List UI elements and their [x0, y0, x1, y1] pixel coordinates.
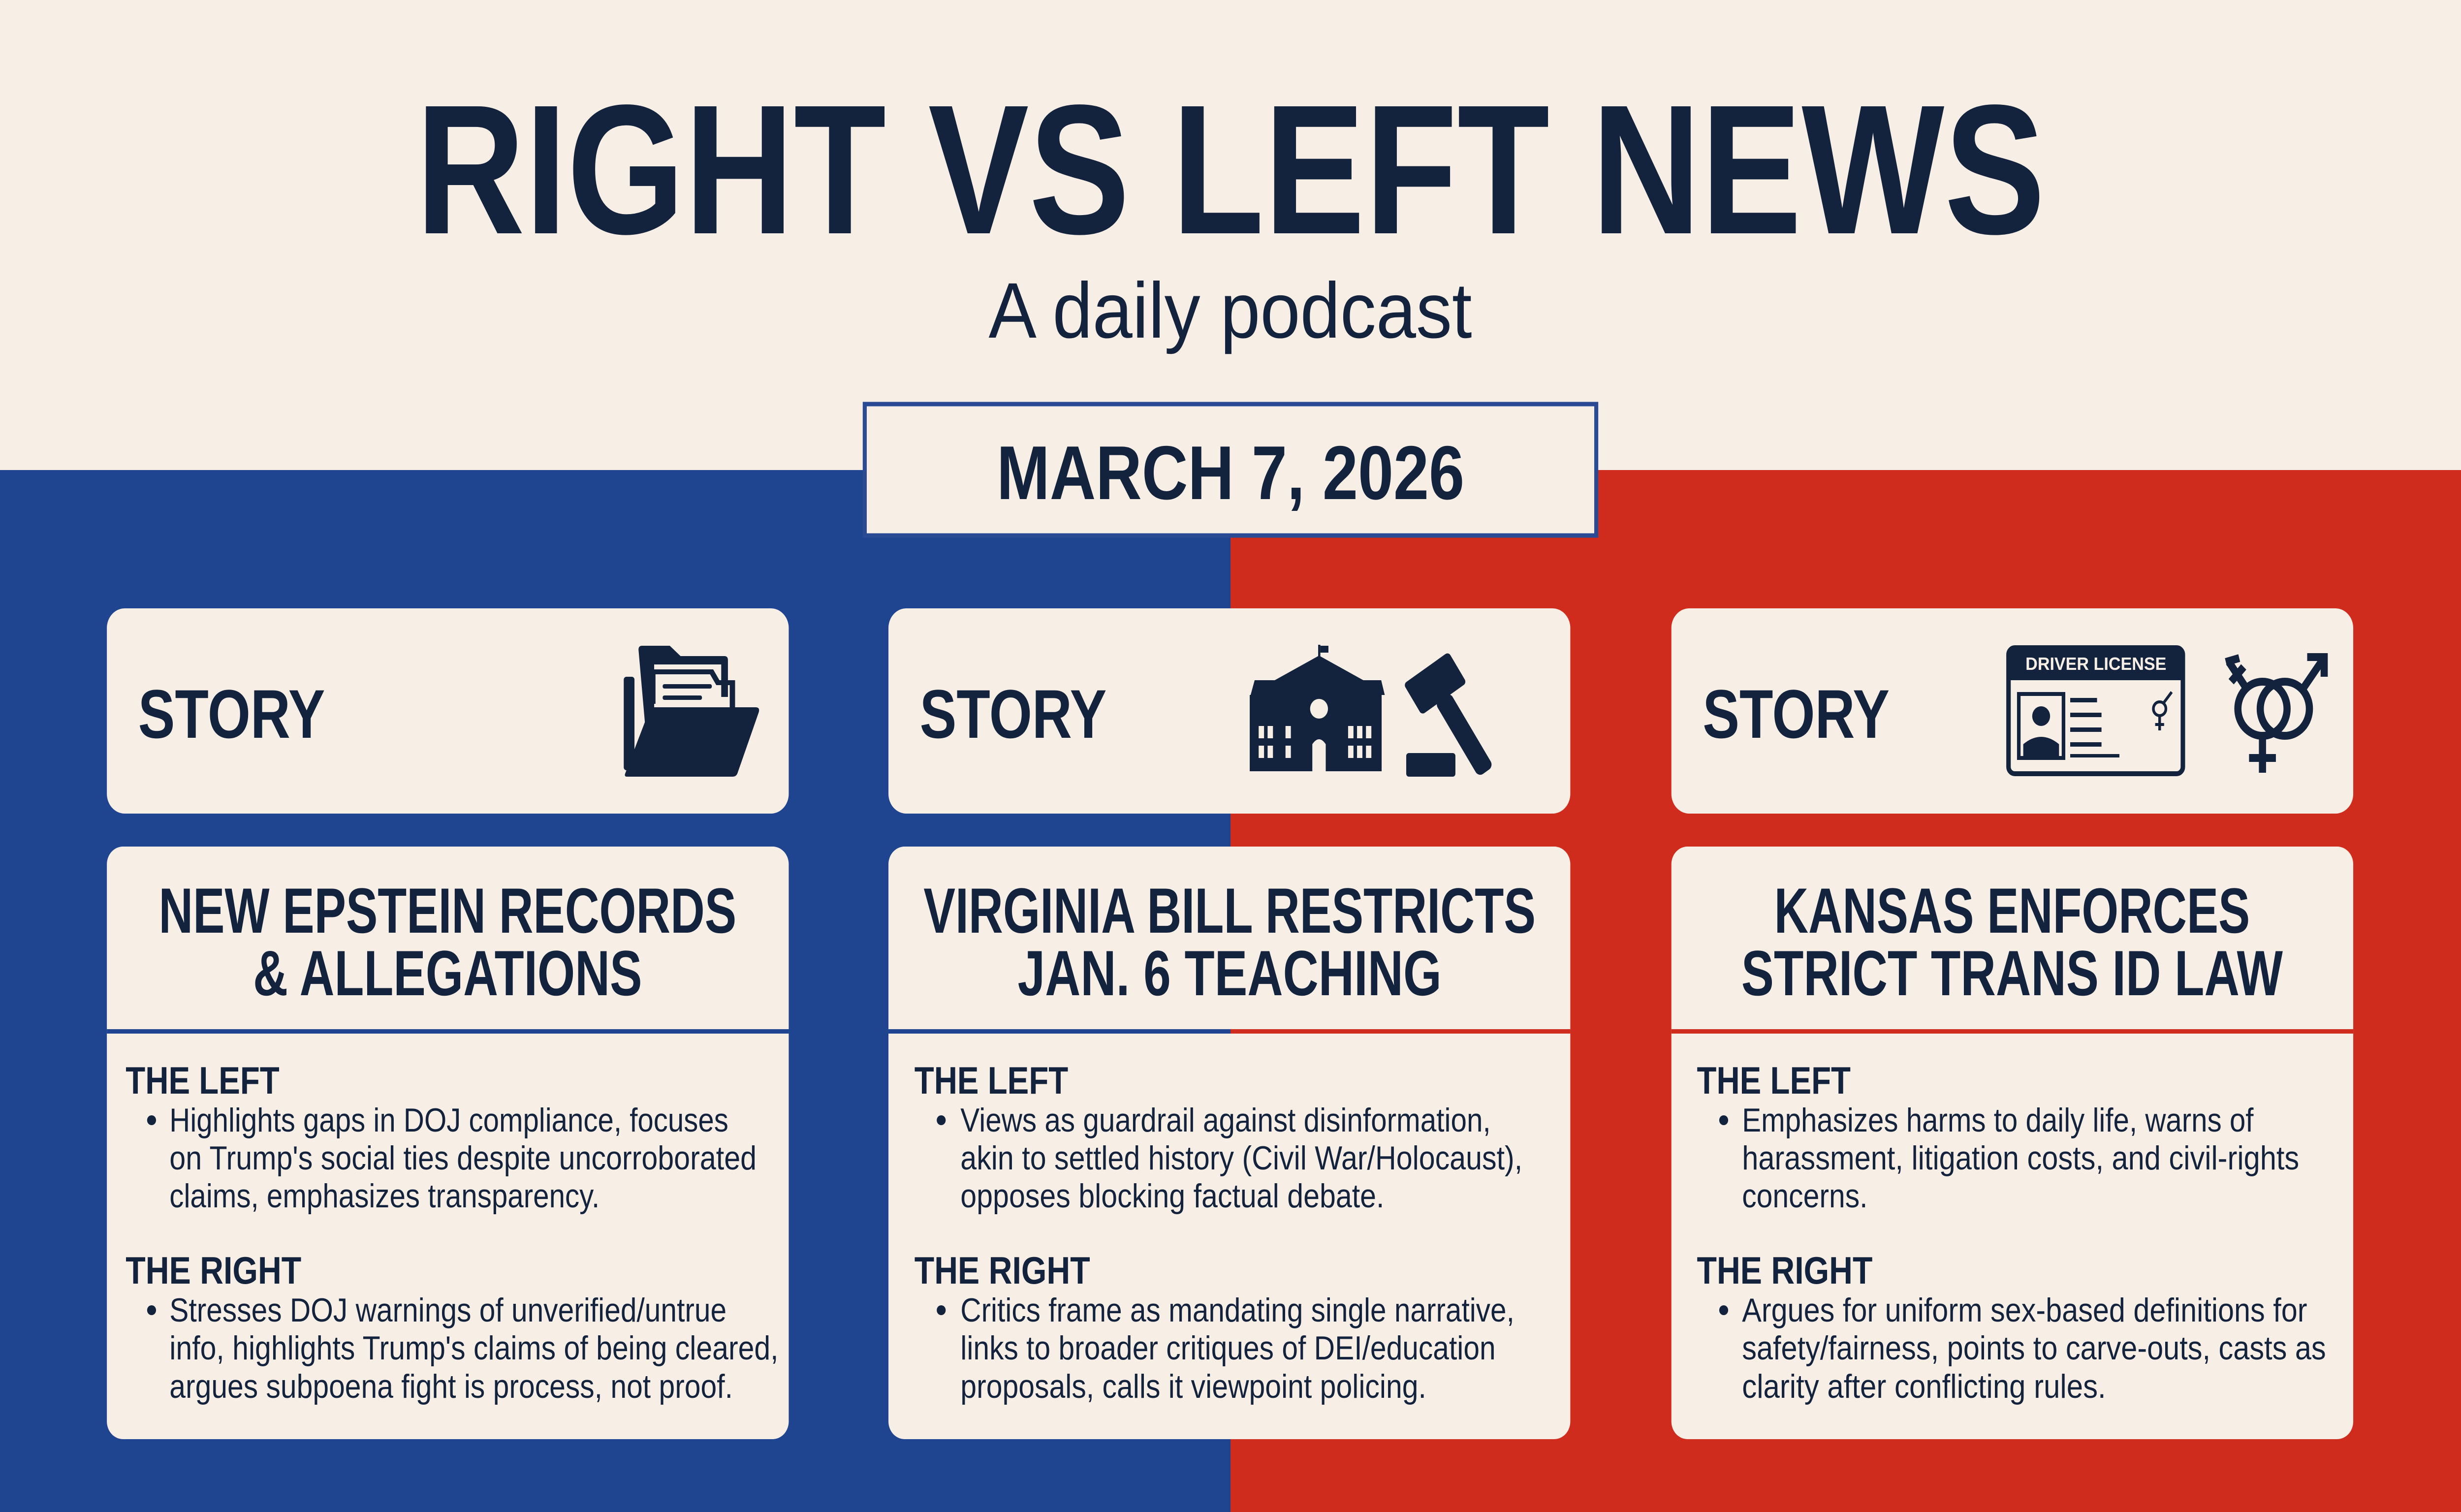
headline right [1741, 876, 2283, 1009]
text block: left view: Highlights gaps in DOJ compliance, focuses [169, 1101, 728, 1139]
panel: story card middle [888, 608, 1570, 814]
text block: left view: Views as guardrail against disinformation, [960, 1101, 1491, 1139]
text block: right view: THE RIGHT [1697, 1249, 1873, 1292]
headline middle: JAN. 6 TEACHING [1018, 938, 1442, 1009]
text block: right view: Critics frame as mandating single narrative, [960, 1291, 1514, 1329]
text block: right view [1697, 1249, 2326, 1405]
text block: right view: clarity after conflicting rules. [1742, 1367, 2106, 1405]
text block: left view: THE LEFT [126, 1059, 280, 1102]
date box: MARCH 7, 2026 [997, 431, 1464, 515]
panel: story card left [107, 608, 789, 814]
text block: left view [126, 1059, 757, 1215]
text block: left view: Emphasizes harms to daily life, warns of [1742, 1101, 2254, 1139]
panel: content right [1672, 847, 2353, 1439]
headline left: NEW EPSTEIN RECORDS [158, 876, 736, 946]
text block: left view: harassment, litigation costs, and civil-rights [1742, 1139, 2299, 1177]
headline middle [923, 876, 1536, 1009]
text block: left view [1697, 1059, 2299, 1215]
headline middle: VIRGINIA BILL RESTRICTS [923, 876, 1536, 946]
text block: left view: claims, emphasizes transparency. [169, 1177, 599, 1215]
text block: right view: argues subpoena fight is process, not proof. [169, 1367, 733, 1405]
icon: gender symbol [2226, 657, 2324, 773]
text block: right view: Stresses DOJ warnings of unverified/untrue [169, 1291, 726, 1329]
text block: right view [915, 1249, 1514, 1405]
text block: right view: safety/fairness, points to carve-outs, casts as [1742, 1329, 2326, 1367]
icon: school [1250, 645, 1385, 771]
subtitle: A daily podcast [989, 267, 1472, 355]
text block: right view: info, highlights Trump's claims of being cleared, [169, 1329, 779, 1367]
panel: content left [107, 847, 789, 1439]
text block: right view: proposals, calls it viewpoint policing. [960, 1367, 1426, 1405]
headline left [158, 876, 736, 1009]
text block: left view: on Trump's social ties despite uncorroborated [169, 1139, 757, 1177]
panel: content middle [888, 847, 1570, 1439]
text block: left view: THE LEFT [1697, 1059, 1851, 1102]
icon: driver license [2009, 648, 2183, 774]
text block: left view: THE LEFT [915, 1059, 1068, 1102]
panel: story card middle: STORY [920, 676, 1106, 753]
text block: right view: THE RIGHT [126, 1249, 301, 1292]
icon: gavel [1403, 652, 1510, 787]
text block: right view: THE RIGHT [915, 1249, 1090, 1292]
date box [865, 404, 1596, 536]
panel: story card right: STORY [1703, 676, 1890, 753]
headline right: KANSAS ENFORCES [1774, 876, 2250, 946]
panel: story card left: STORY [138, 676, 325, 753]
text block: left view [915, 1059, 1522, 1215]
headline left: & ALLEGATIONS [253, 938, 642, 1009]
icon: driver license: DRIVER LICENSE [2025, 655, 2166, 674]
panel: story card right [1672, 608, 2353, 814]
text block: right view: links to broader critiques of DEI/education [960, 1329, 1496, 1367]
icon: folder [624, 646, 759, 777]
title: RIGHT VS LEFT NEWS [416, 66, 2045, 273]
text block: left view: opposes blocking factual debate. [960, 1177, 1385, 1215]
text block: right view [126, 1249, 779, 1405]
text block: left view: concerns. [1742, 1177, 1868, 1215]
text block: left view: akin to settled history (Civil War/Holocaust), [960, 1139, 1522, 1177]
headline right: STRICT TRANS ID LAW [1741, 938, 2283, 1009]
text block: right view: Argues for uniform sex-based definitions for [1742, 1291, 2307, 1329]
